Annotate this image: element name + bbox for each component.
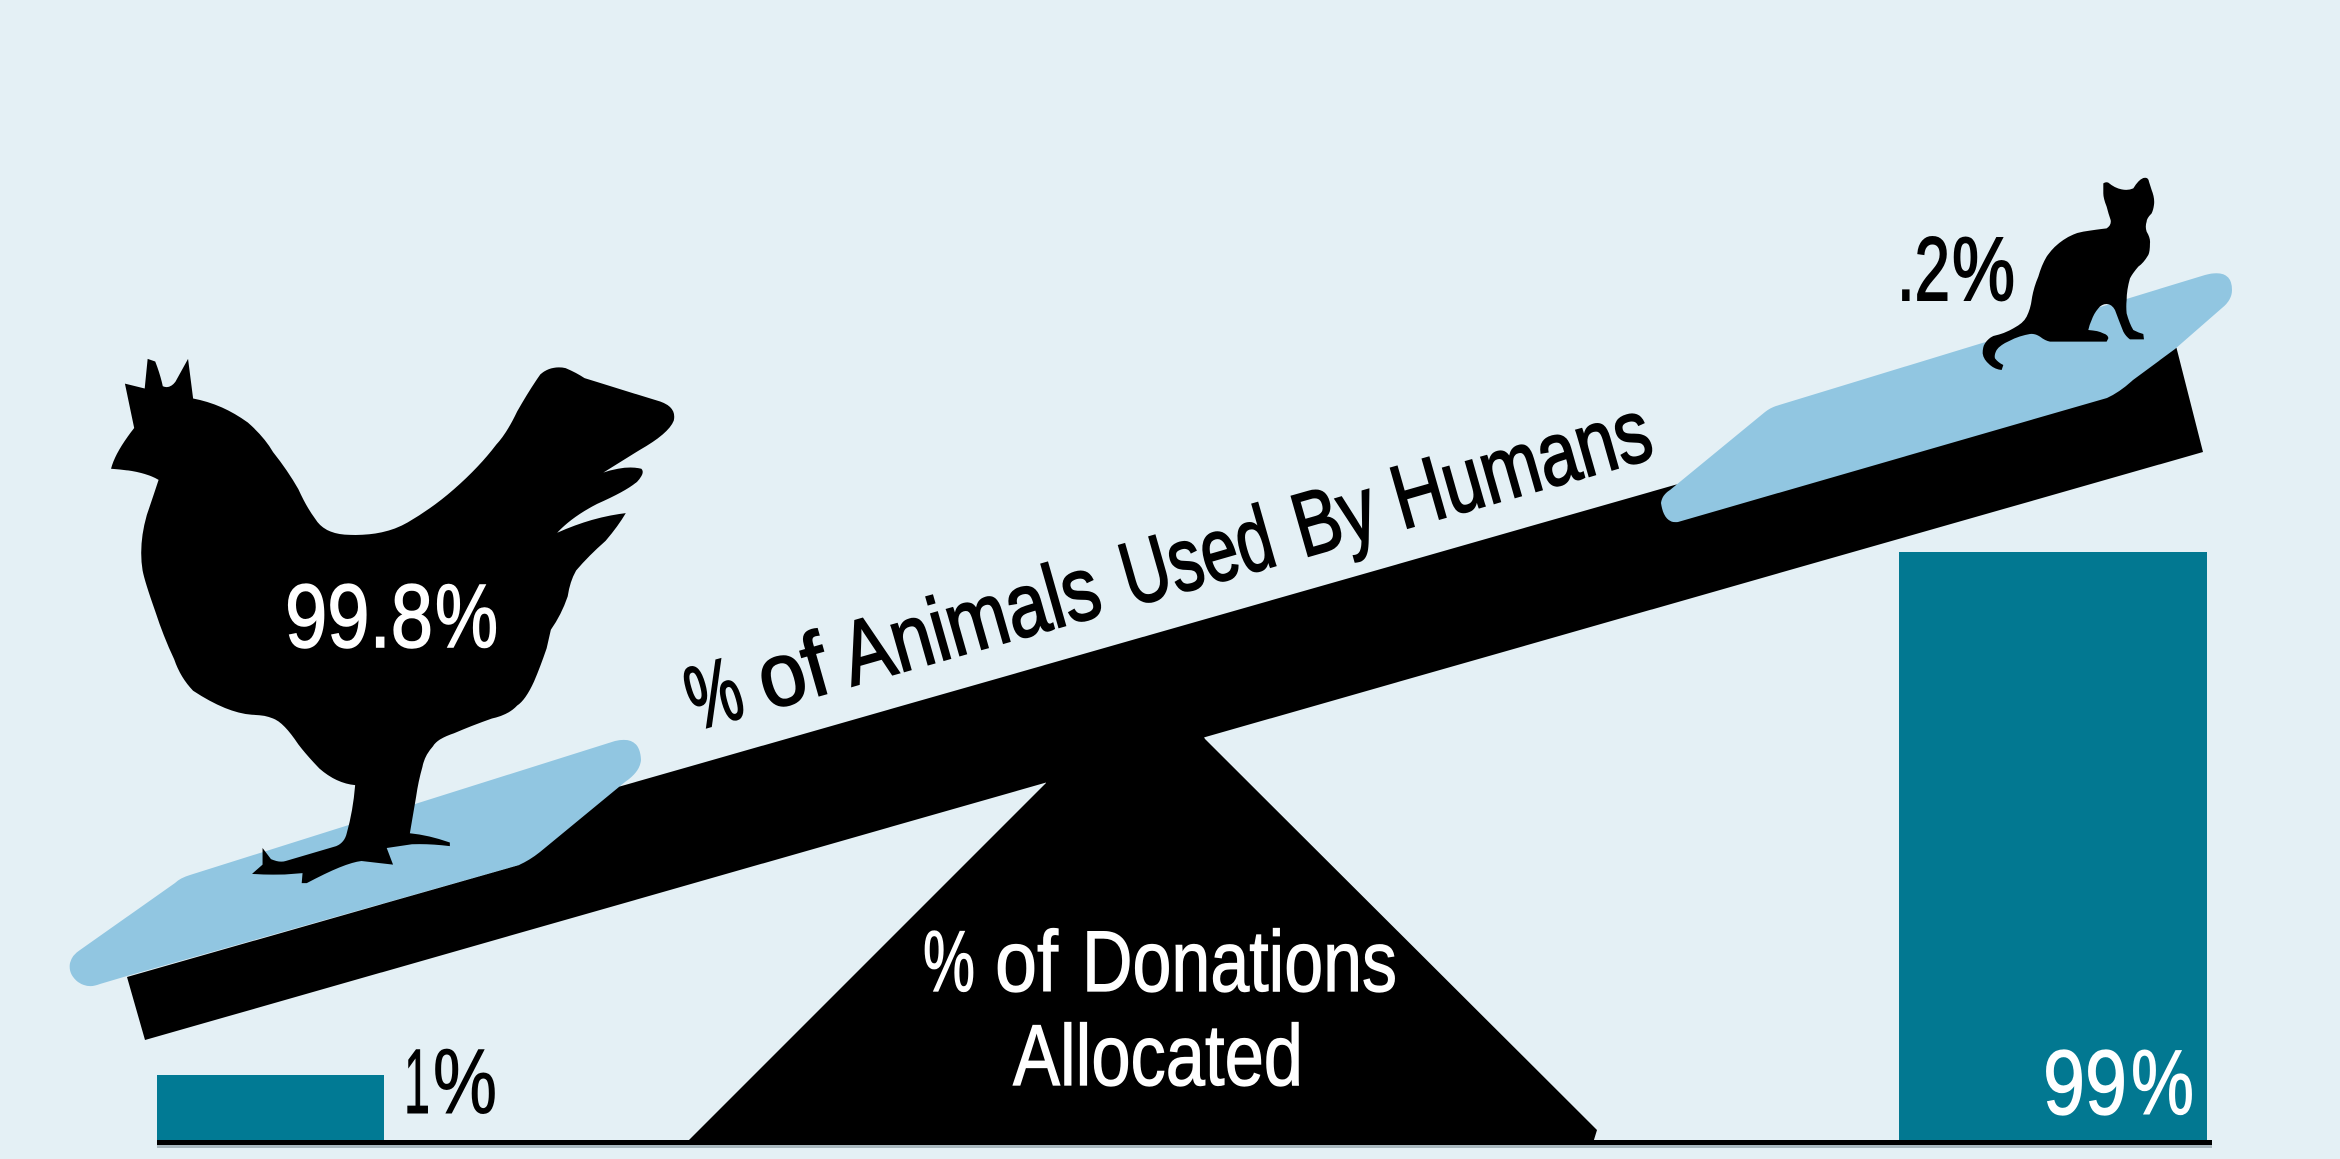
rotated label: % of Animals Used By Humans: Used [1109,487,1285,626]
bar: 1% of donations [157,1031,497,1140]
label: 99%: 99 [2043,1032,2127,1134]
label: 99.8%: % [435,567,498,667]
icon: chicken silhouette [111,359,674,883]
fulcrum label: % [923,914,975,1010]
rotated label: % of Animals Used By Humans: Humans [1380,380,1662,549]
label: 1%: % [433,1031,497,1133]
rotated label: % of Animals Used By Humans: By [1281,458,1387,577]
label: 99.8%: 99.8 [285,567,433,667]
label: .2%: % [1952,220,2015,320]
label: 99%: % [2131,1032,2194,1134]
label: 1%: 1 [404,1031,430,1133]
rotated label: % of Animals Used By Humans: Animals [830,537,1111,705]
label: .2%: .2 [1897,220,1950,320]
left blue plate [70,740,641,986]
rotated label: % of Animals Used By Humans: % [674,639,753,750]
fulcrum triangle [688,730,1597,1143]
right blue plate [1661,273,2232,522]
seesaw beam [127,342,2203,1040]
icon: cat silhouette [1983,178,2154,370]
fulcrum label: Donations [1082,914,1397,1010]
fulcrum label: of [995,914,1059,1010]
bar: 99% of donations [1899,552,2207,1140]
fulcrum label: Allocated [1013,1008,1303,1104]
rotated label: % of Animals Used By Humans: of [745,614,841,730]
